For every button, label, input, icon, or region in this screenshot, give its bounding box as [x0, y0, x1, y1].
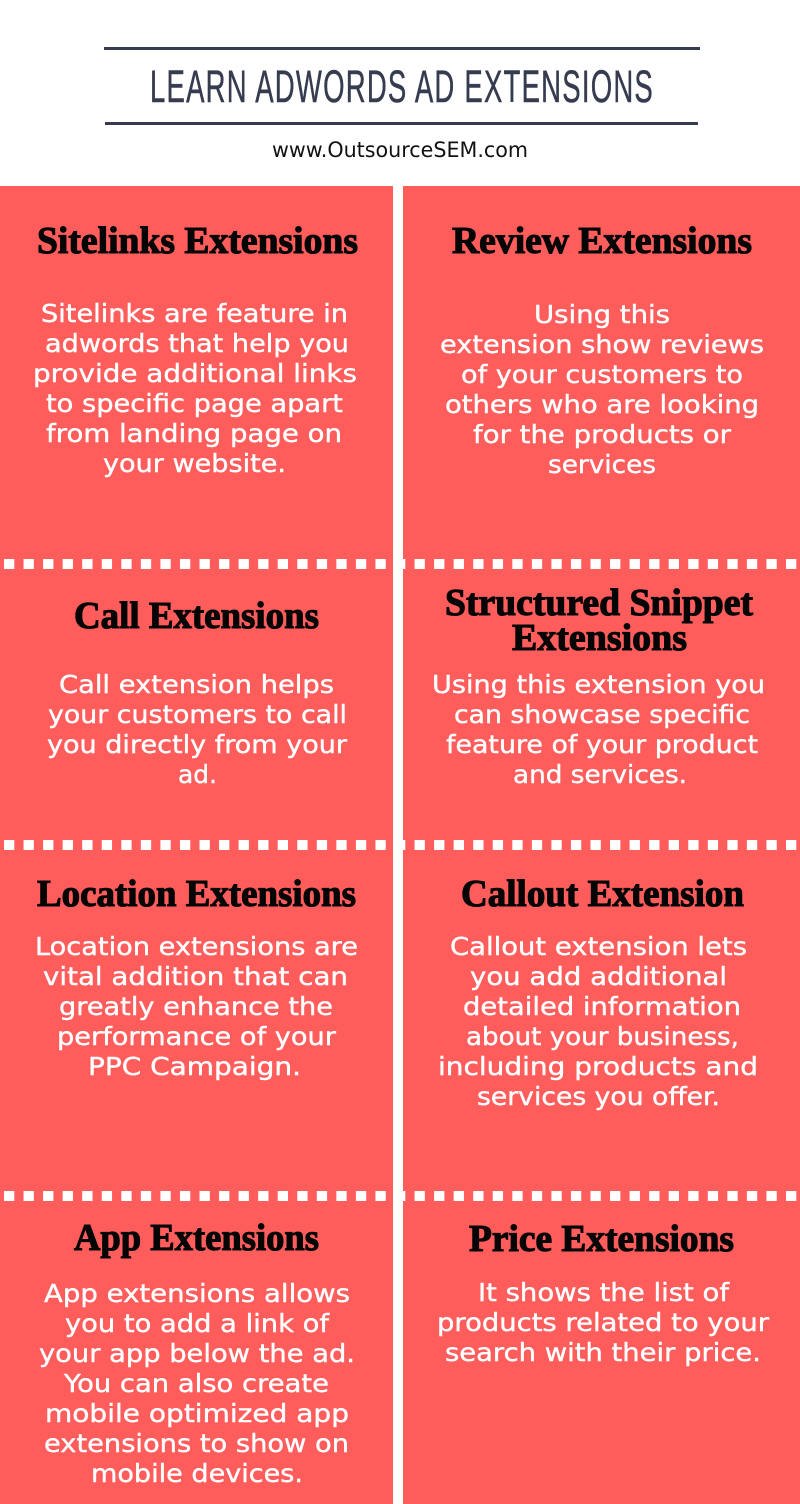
body text: It shows the list of [478, 1278, 731, 1307]
body text: provide additional links [33, 359, 357, 388]
heading: Callout Extension [461, 873, 744, 915]
panel: right column background [403, 186, 800, 1504]
panel: structured snippet extensions [432, 582, 765, 789]
heading: Price Extensions [469, 1218, 734, 1260]
body text: you directly from your [47, 730, 348, 759]
body text: adwords that help you [45, 329, 349, 358]
dotted divider 3 [4, 1191, 800, 1201]
body text: App extensions allows [44, 1279, 350, 1308]
heading: Review Extensions [452, 220, 752, 262]
heading: Call Extensions [74, 595, 319, 637]
body text: extensions to show on [44, 1429, 349, 1458]
body text: Using this [534, 300, 670, 329]
body text: services you offer. [477, 1082, 720, 1111]
body text: to specific page apart [46, 389, 343, 418]
body text: for the products or [473, 420, 732, 449]
heading: App Extensions [74, 1217, 319, 1259]
body text: your website. [103, 449, 286, 478]
body text: you to add a link of [65, 1309, 331, 1338]
body text: you add additional [470, 962, 727, 991]
panel: app extensions [39, 1217, 355, 1488]
panel: review extensions [440, 220, 764, 479]
body text: Call extension helps [59, 670, 334, 699]
body text: feature of your product [446, 730, 758, 759]
body text [33, 299, 357, 478]
body text: of your customers to [461, 360, 743, 389]
body text [440, 300, 764, 479]
body text: performance of your [57, 1022, 337, 1051]
heading: Extensions [512, 617, 687, 659]
panel: call extensions [47, 595, 348, 789]
panel: sitelinks extensions [33, 220, 358, 478]
body text [438, 932, 758, 1111]
body text [39, 1279, 355, 1488]
panel: price extensions [437, 1218, 770, 1367]
website url: www.OutsourceSEM.com [272, 138, 528, 162]
body text: mobile devices. [91, 1459, 303, 1488]
body text: PPC Campaign. [88, 1052, 301, 1081]
body text [47, 670, 348, 789]
body text [432, 670, 765, 789]
body text: products related to your [437, 1308, 770, 1337]
body text: and services. [513, 760, 687, 789]
body text [437, 1278, 770, 1367]
body text: Using this extension you [432, 670, 765, 699]
body text: about your business, [466, 1022, 739, 1051]
body text: can showcase specific [454, 700, 750, 729]
panel: callout extension [438, 873, 758, 1111]
heading: Structured Snippet [445, 582, 753, 624]
body text [35, 932, 358, 1081]
panel: left column background [0, 186, 393, 1504]
body text: search with their price. [445, 1338, 761, 1367]
body text: including products and [438, 1052, 758, 1081]
body text: ad. [178, 760, 217, 789]
body text: services [548, 450, 656, 479]
body text: others who are looking [445, 390, 759, 419]
body text: vital addition that can [43, 962, 348, 991]
body text: your app below the ad. [39, 1339, 355, 1368]
body text: your customers to call [48, 700, 347, 729]
dotted divider 2 [4, 840, 800, 850]
header [104, 47, 700, 125]
body text: mobile optimized app [45, 1399, 349, 1428]
heading [445, 582, 753, 659]
heading: Location Extensions [37, 873, 356, 915]
dotted divider 1 [4, 559, 800, 569]
body text: extension show reviews [440, 330, 764, 359]
body text: greatly enhance the [59, 992, 333, 1021]
body text: Callout extension lets [450, 932, 747, 961]
body text: Sitelinks are feature in [41, 299, 348, 328]
body text: You can also create [63, 1369, 329, 1398]
panel: location extensions [35, 873, 358, 1081]
heading: Sitelinks Extensions [37, 220, 358, 262]
body text: from landing page on [46, 419, 342, 448]
body text: Location extensions are [35, 932, 358, 961]
body text: detailed information [463, 992, 741, 1021]
